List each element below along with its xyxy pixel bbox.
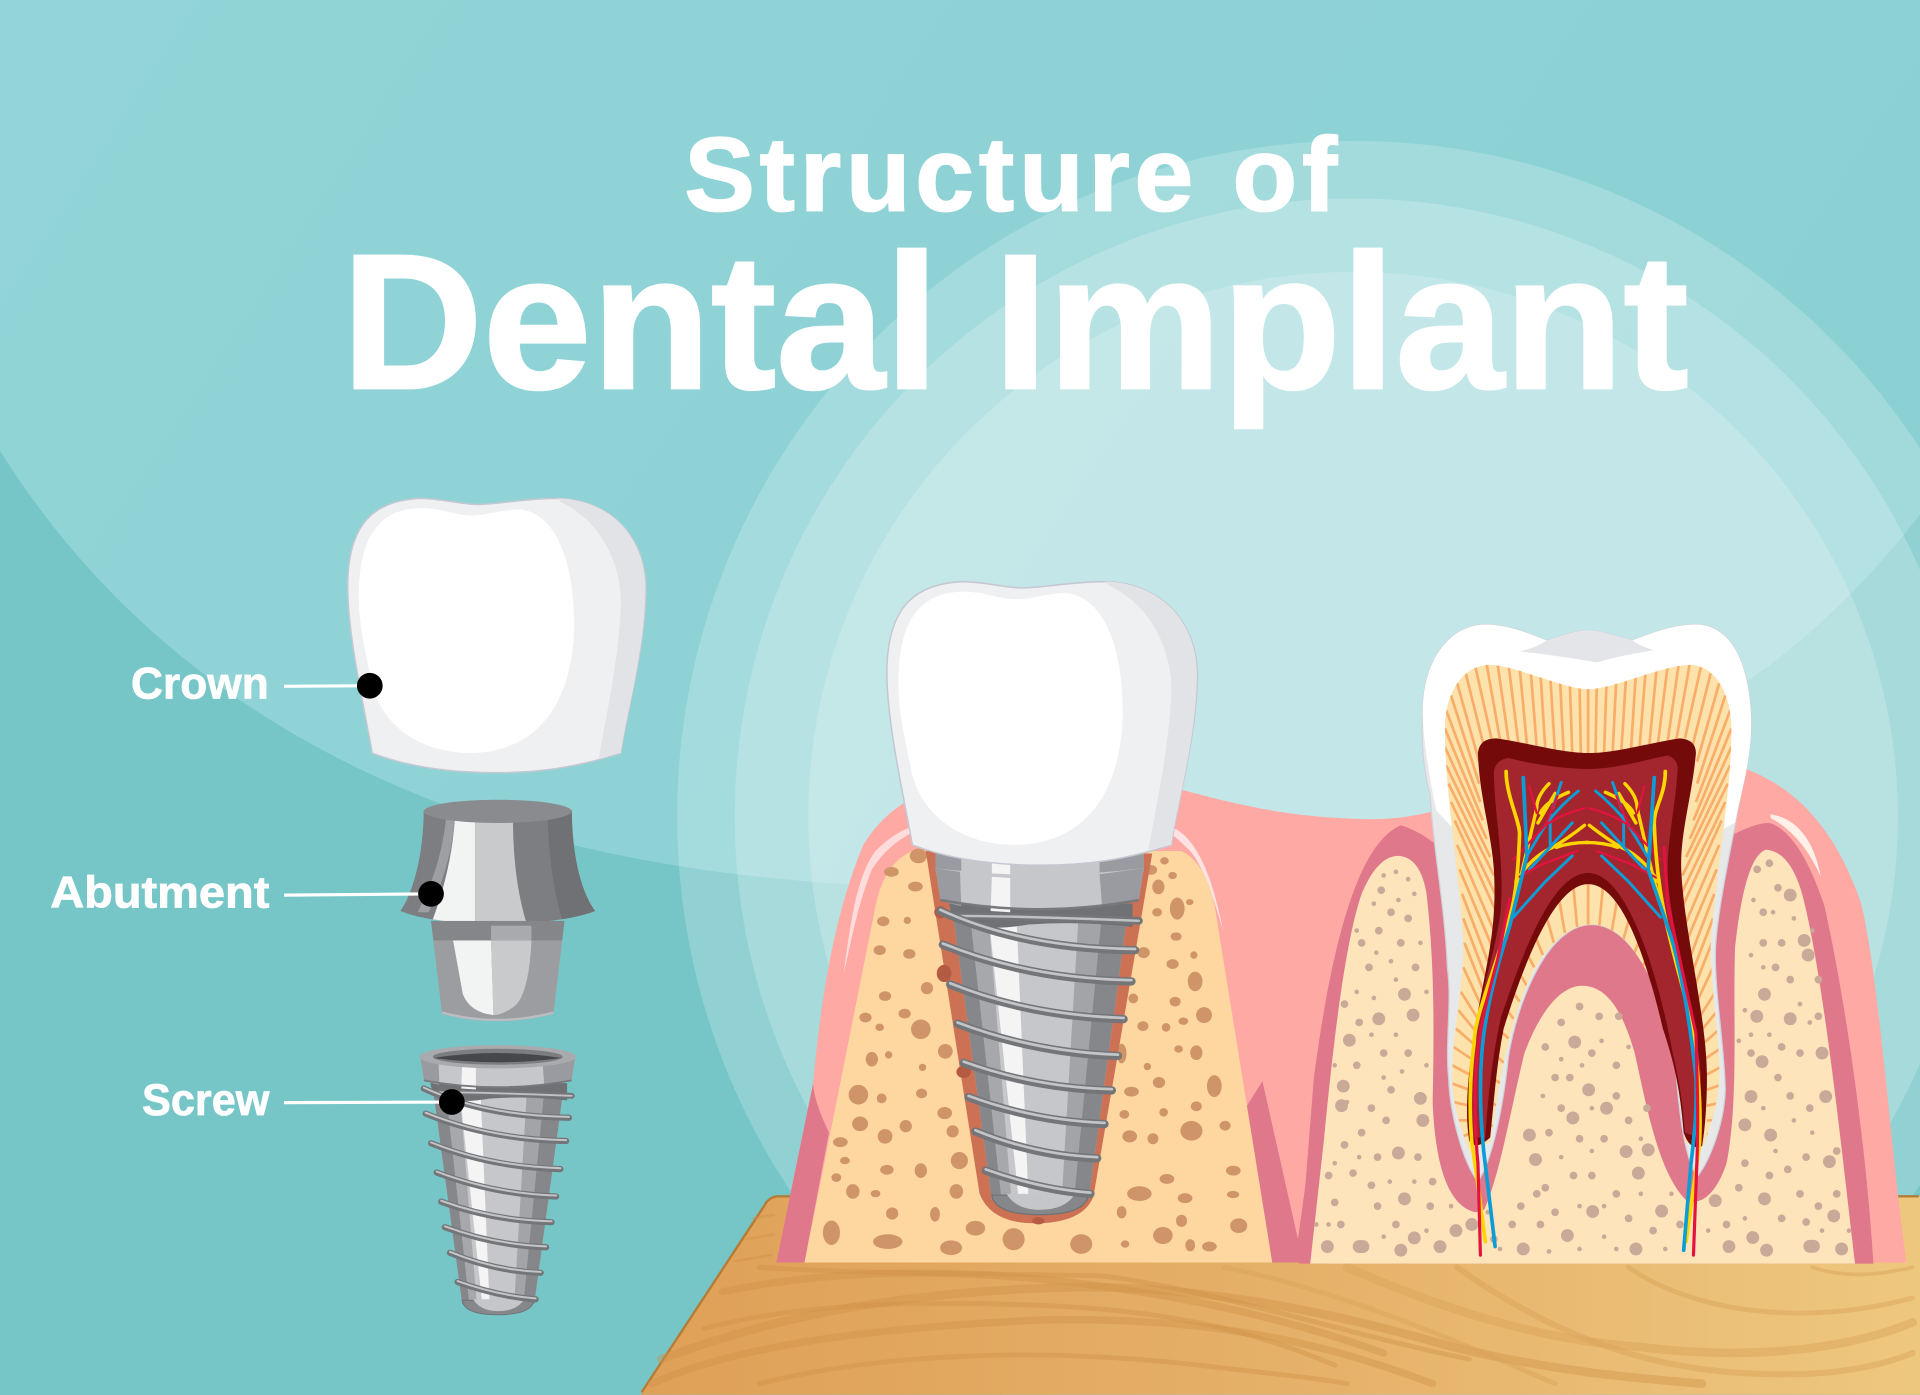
gum cross-section (776, 769, 1907, 1264)
socket spots (934, 906, 1044, 1224)
gum inner pink around natural tooth (1299, 823, 1873, 1264)
dentin tubules (1445, 664, 1731, 1136)
label: Abutment (50, 868, 444, 917)
label: Screw: Screw (142, 1076, 270, 1125)
pulp outer (1467, 738, 1707, 1147)
part: screw (419, 1045, 576, 1315)
jaw bone around implant (804, 849, 1272, 1262)
title line: Dental Implant: Dental Implant (342, 214, 1689, 429)
gum inner pink centre (1239, 1079, 1320, 1262)
part: crown (348, 498, 646, 773)
implant in place: screw (936, 852, 1144, 1215)
abutment lower (431, 920, 564, 1022)
bone pores medium (1329, 863, 1837, 1239)
abutment top (424, 800, 572, 823)
label: Screw (142, 1076, 465, 1125)
enamel top shade (1520, 631, 1654, 662)
implant in place: crown (887, 582, 1198, 865)
vessels: nerve, vein, artery (1470, 771, 1700, 1255)
title (342, 117, 1689, 429)
gum tissue (776, 769, 1907, 1262)
pulp inner (1469, 756, 1701, 1138)
label: Abutment: Abutment (50, 868, 270, 917)
part: abutment (400, 800, 595, 1022)
gum highlight centre (1173, 828, 1223, 932)
dentin (1445, 665, 1731, 1151)
natural tooth bone (1310, 850, 1855, 1264)
gum highlight left (844, 827, 912, 973)
enamel (1423, 624, 1751, 833)
bone pores (823, 849, 1247, 1255)
abutment upper (400, 810, 595, 921)
bone pores large (1327, 895, 1842, 1250)
title line: Structure of: Structure of (684, 117, 1338, 234)
wooden table (640, 1196, 1920, 1395)
bone pores small (1316, 872, 1849, 1251)
implant socket (926, 851, 1152, 1223)
gum inner pink left (776, 1084, 829, 1262)
label: Crown (131, 660, 383, 709)
natural tooth (1422, 624, 1751, 1255)
label: Crown: Crown (131, 660, 269, 709)
tooth root coat (1422, 624, 1751, 1182)
gum highlight right (1771, 814, 1821, 877)
